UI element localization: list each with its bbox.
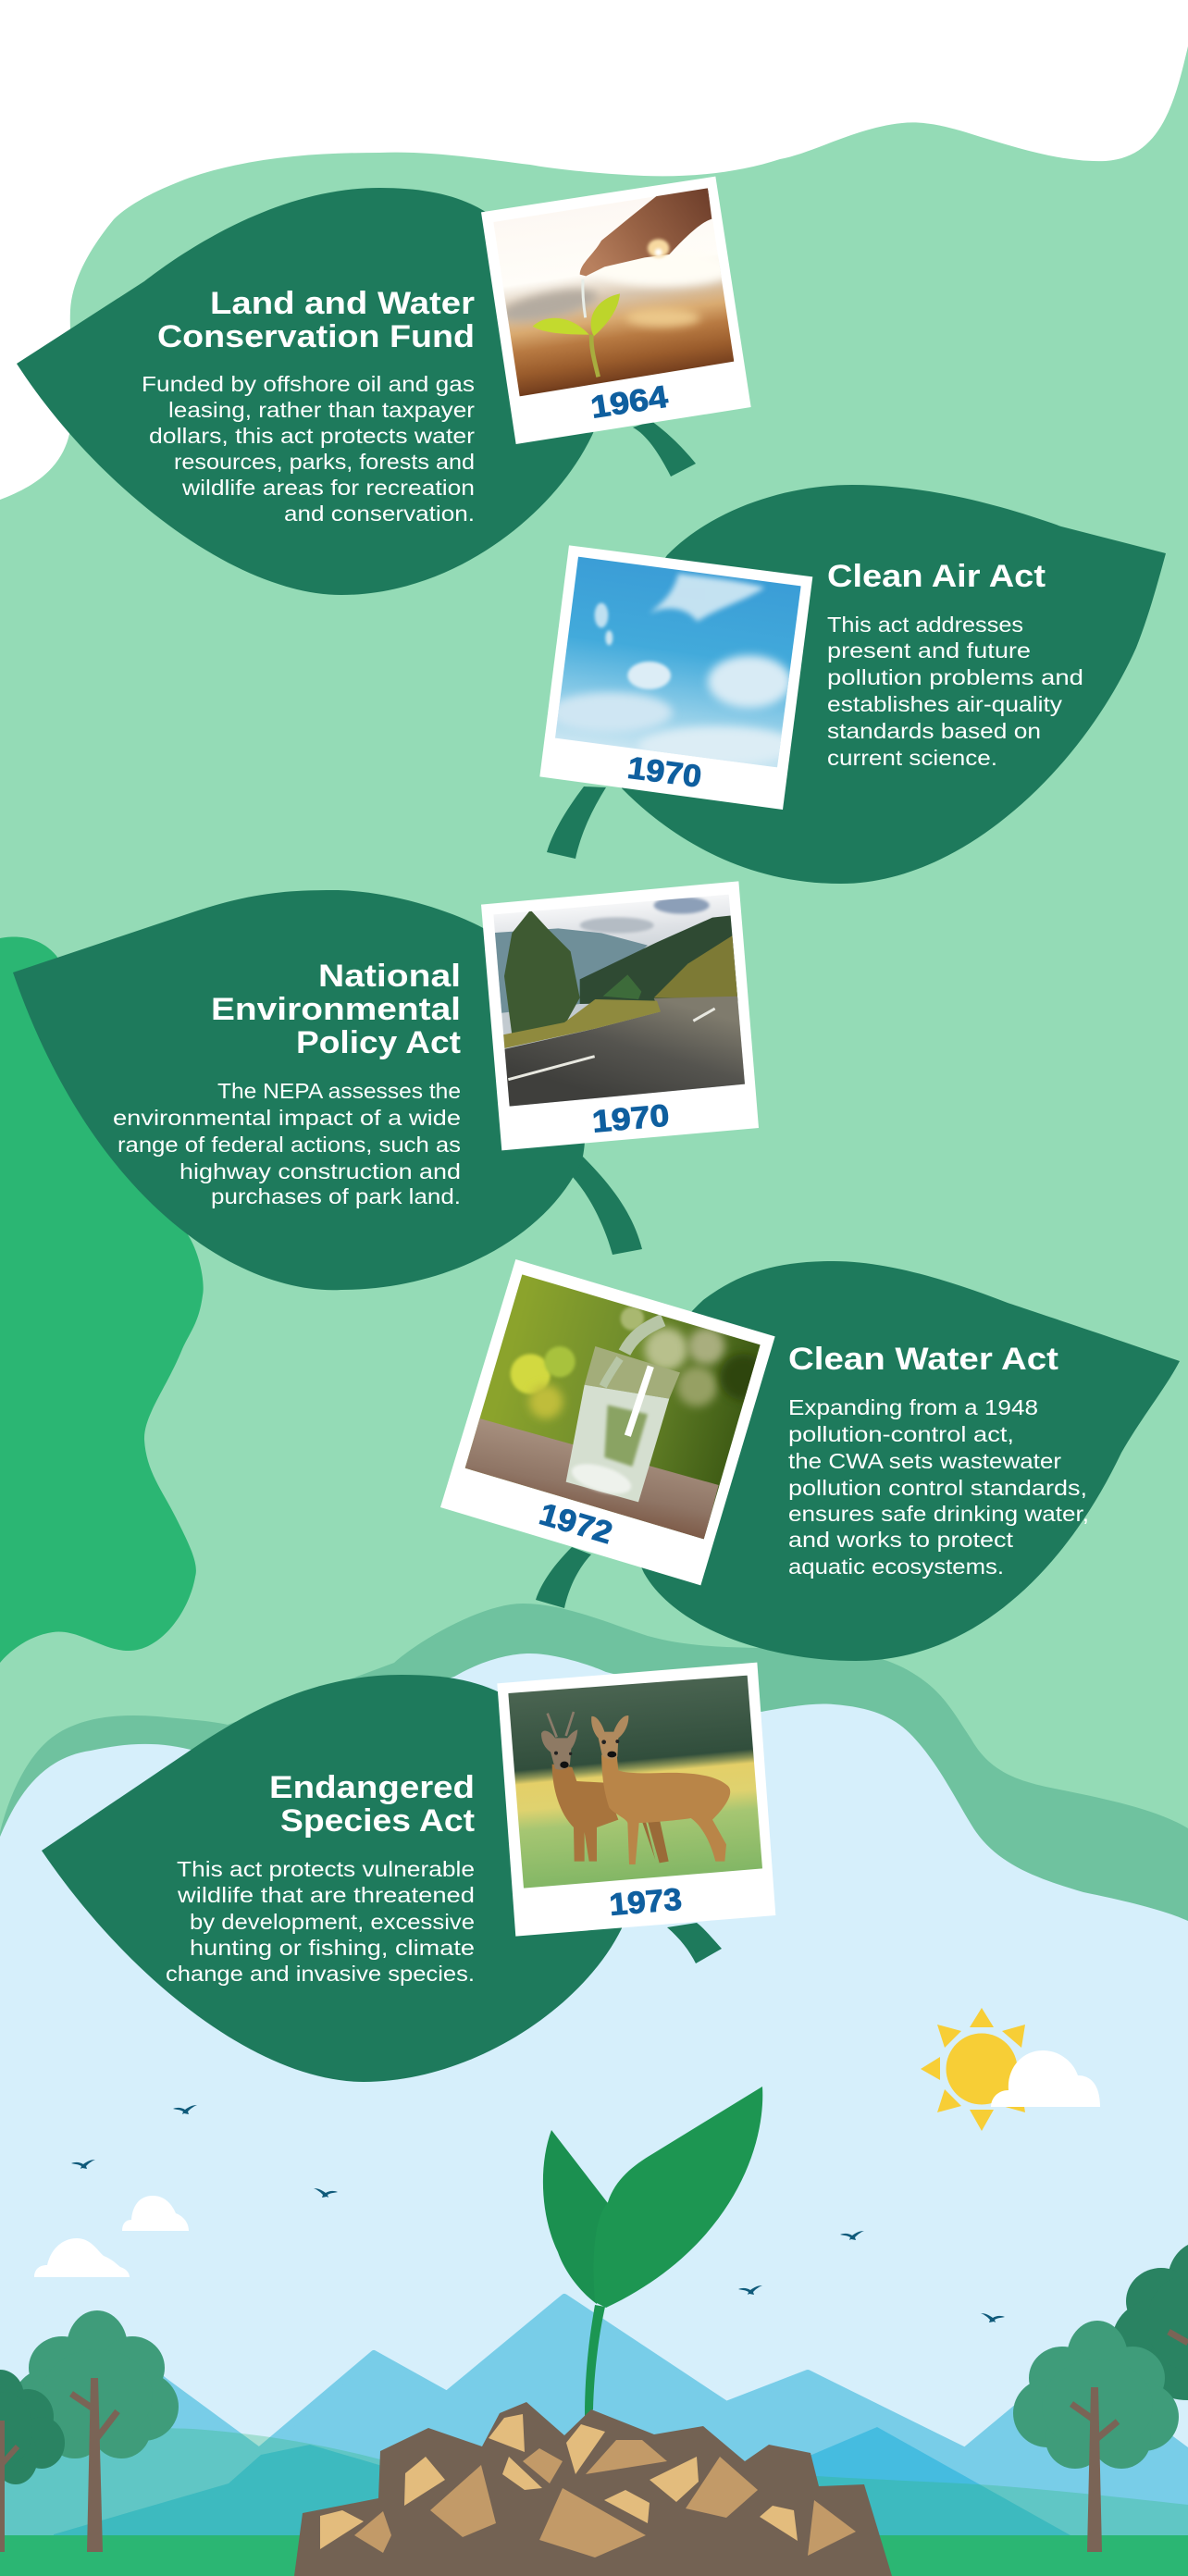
body text [166, 1857, 475, 1986]
leaf stem [536, 1547, 591, 1608]
body text: wildlife that are threatened [177, 1883, 475, 1907]
leaf shape [13, 890, 585, 1290]
body text: purchases of park land. [211, 1184, 461, 1208]
body text: range of federal actions, such as [118, 1133, 461, 1157]
heading: Policy Act [296, 1025, 461, 1060]
heading: Conservation Fund [157, 319, 475, 354]
photo: mountain road 1970 [481, 881, 759, 1151]
panel: National Environmental Policy Act [13, 874, 768, 1290]
leaf shape [42, 1675, 625, 2082]
heading [157, 286, 475, 354]
body text [142, 372, 475, 526]
body text: pollution problems and [827, 665, 1083, 689]
photo: sky 1970 [539, 545, 812, 810]
photo: glass of water 1972 [435, 1254, 777, 1596]
heading: National [318, 959, 461, 994]
body text: Funded by offshore oil and gas [142, 372, 475, 396]
seedling [543, 2087, 762, 2416]
body text: current science. [827, 746, 997, 770]
tree: right front [1013, 2321, 1179, 2552]
body text: pollution control standards, [788, 1476, 1087, 1500]
photo: deer 1973: 1973 [608, 1883, 683, 1923]
leaf shape [17, 188, 602, 595]
heading: Clean Air Act [827, 559, 1046, 594]
body text [113, 1079, 461, 1208]
body text: aquatic ecosystems. [788, 1554, 1004, 1579]
icon: cloud left [34, 2238, 130, 2277]
body text: by development, excessive [190, 1910, 475, 1934]
body text: hunting or fishing, climate [190, 1936, 475, 1960]
leaf stem [633, 421, 696, 477]
leaf shape [613, 485, 1166, 884]
heading [269, 1770, 475, 1839]
tree: left large [13, 2310, 179, 2552]
icon: cloud by sun [991, 2050, 1100, 2107]
body text: the CWA sets wastewater [788, 1449, 1061, 1473]
icon: sun [921, 2008, 1025, 2131]
panel: Endangered Species Act [42, 1656, 786, 2082]
body text: establishes air-quality [827, 692, 1063, 716]
panel: Land and Water Conservation Fund [17, 167, 759, 595]
background: green blob [0, 936, 204, 1663]
icon: small cloud [122, 2196, 189, 2231]
panel: Clean Air Act [527, 485, 1166, 884]
body text: The NEPA assesses the [217, 1079, 461, 1103]
body text: This act addresses [827, 613, 1023, 637]
tree: left front [0, 2370, 65, 2552]
landscape: ground [0, 2535, 1188, 2576]
body text: dollars, this act protects water [149, 424, 475, 448]
background: darker mint band [0, 1604, 1188, 2576]
photo: glass of water 1972: 1972 [536, 1497, 616, 1551]
body text [827, 613, 1083, 770]
body text: standards based on [827, 719, 1041, 743]
body text: leasing, rather than taxpayer [168, 398, 475, 422]
icons: birds [71, 2105, 1005, 2322]
heading: Environmental [211, 992, 461, 1027]
body text: pollution-control act, [788, 1422, 1014, 1446]
tree: right back [1112, 2241, 1188, 2400]
heading [211, 959, 461, 1060]
landscape: mountains and hills [0, 2297, 1188, 2535]
background: sky [0, 1653, 1188, 2576]
body text: This act protects vulnerable [177, 1857, 475, 1881]
leaf stem [572, 1157, 642, 1255]
body text: change and invasive species. [166, 1962, 475, 1986]
heading: Land and Water [210, 286, 475, 321]
body text: resources, parks, forests and [174, 450, 475, 474]
photo: sky 1970: 1970 [625, 751, 703, 795]
heading: Clean Water Act [788, 1342, 1058, 1377]
leaf shape [624, 1261, 1180, 1661]
leaf stem [547, 786, 606, 859]
body text: and conservation. [284, 502, 475, 526]
photo: seedling 1964 [481, 176, 751, 444]
heading: Species Act [280, 1803, 475, 1839]
photo: deer 1973 [490, 1656, 786, 1943]
body text: environmental impact of a wide [113, 1106, 461, 1130]
panel: Clean Water Act [435, 1254, 1180, 1661]
body text: and works to protect [788, 1528, 1014, 1552]
body text: ensures safe drinking water, [788, 1502, 1089, 1526]
body text: Expanding from a 1948 [788, 1395, 1038, 1419]
body text [788, 1395, 1089, 1579]
photo: mountain road 1970: 1970 [591, 1098, 671, 1140]
soil mound [294, 2402, 892, 2576]
body text: present and future [827, 638, 1031, 663]
leaf stem [667, 1923, 722, 1963]
heading: Endangered [269, 1770, 475, 1805]
body text: highway construction and [179, 1159, 461, 1183]
photo: seedling 1964: 1964 [588, 380, 671, 426]
body text: wildlife areas for recreation [181, 476, 475, 500]
